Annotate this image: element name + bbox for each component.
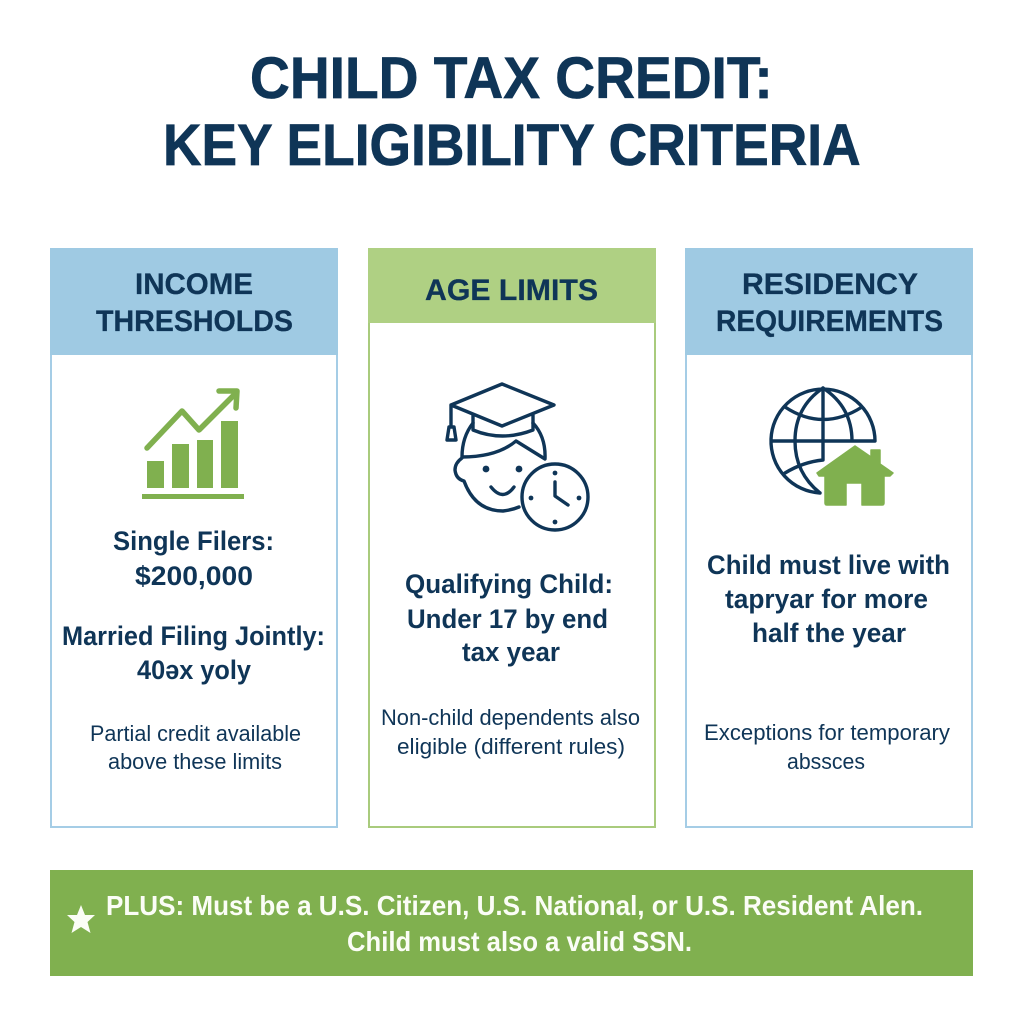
panel header: residency requirements: REQUIREMENTS <box>716 305 943 338</box>
note: temporary absences: Exceptions for temporary <box>704 720 951 745</box>
text: residency rule: tapryar for more <box>725 584 928 614</box>
panel: residency requirements <box>685 248 973 827</box>
note: partial credit: Partial credit available <box>90 721 301 746</box>
note: partial credit <box>90 721 301 774</box>
note: temporary absences <box>704 720 951 774</box>
panel: income thresholds <box>50 248 338 827</box>
footer text: PLUS: Must be a U.S. Citizen, U.S. National, or U.S. Resident Alen. <box>106 890 923 921</box>
title: CHILD TAX CREDIT: <box>250 46 773 110</box>
title <box>163 46 861 177</box>
panel: age limits <box>368 248 656 827</box>
panel header: residency requirements <box>685 248 973 355</box>
footer text: Child must also a valid SSN. <box>347 926 692 957</box>
footer text <box>106 890 923 957</box>
text: filing limits: Single Filers: <box>113 526 274 556</box>
text: qualifying child: tax year <box>462 637 560 667</box>
note: non-child dependents <box>381 705 640 759</box>
text: filing limits: 40əx yoly <box>137 655 251 685</box>
icon: rising bar chart <box>142 391 244 499</box>
panel header: age limits: AGE LIMITS <box>425 274 598 307</box>
text: filing limits <box>62 526 325 685</box>
icon: globe with house <box>771 388 893 505</box>
panel header: age limits <box>368 248 656 323</box>
panel header: residency requirements: RESIDENCY <box>742 268 918 301</box>
icon: star <box>67 905 95 933</box>
icon: child with graduation cap and clock <box>447 384 588 530</box>
text: qualifying child <box>405 569 613 667</box>
panel header: income thresholds: INCOME <box>135 268 253 301</box>
note: non-child dependents: eligible (different rules) <box>397 734 625 759</box>
text: residency rule <box>707 550 950 648</box>
note: temporary absences: abssces <box>787 749 865 774</box>
panel header: income thresholds: THRESHOLDS <box>96 305 293 338</box>
text: filing limits: $200,000 <box>135 561 253 591</box>
panel header: income thresholds <box>50 248 338 355</box>
text: residency rule: half the year <box>752 618 906 648</box>
text: qualifying child: Qualifying Child: <box>405 569 613 599</box>
note: non-child dependents: Non-child dependents also <box>381 705 640 730</box>
text: filing limits: Married Filing Jointly: <box>62 621 325 651</box>
note: partial credit: above these limits <box>108 749 282 774</box>
footer banner <box>50 870 973 976</box>
title: KEY ELIGIBILITY CRITERIA <box>163 113 861 177</box>
text: residency rule: Child must live with <box>707 550 950 580</box>
text: qualifying child: Under 17 by end <box>407 604 608 634</box>
